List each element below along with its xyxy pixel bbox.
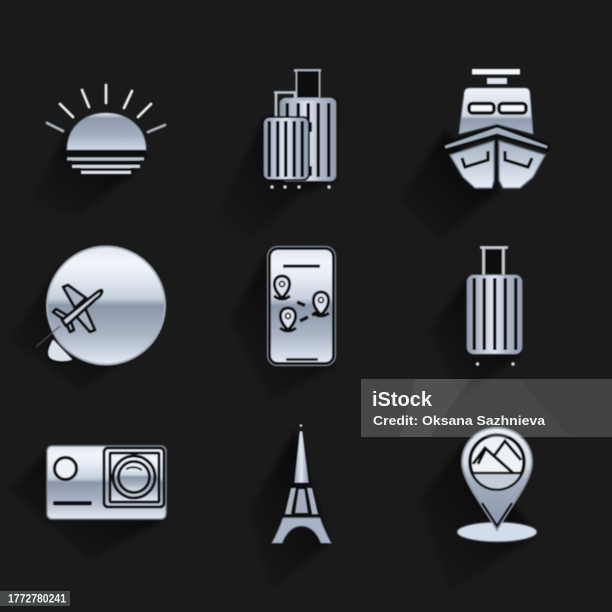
icon: action camera <box>47 446 166 519</box>
image id badge <box>0 591 70 606</box>
icon: ship <box>443 69 549 188</box>
watermark band <box>361 379 612 437</box>
icon: globe with plane <box>36 246 165 364</box>
icon: mountain location pin <box>457 428 537 542</box>
plane trail <box>36 326 60 347</box>
icon: two suitcases <box>263 70 336 189</box>
icon: phone with route map <box>268 246 336 366</box>
watermark: credit: Credit: Oksana Sazhnieva <box>373 414 546 428</box>
watermark: iStock: iStock <box>372 389 433 411</box>
icon: Eiffel tower <box>272 424 331 543</box>
long shadows <box>10 98 537 590</box>
image id badge: 1772780241 <box>8 594 67 606</box>
icon: sunset <box>47 85 165 174</box>
icon: suitcase <box>467 247 522 366</box>
